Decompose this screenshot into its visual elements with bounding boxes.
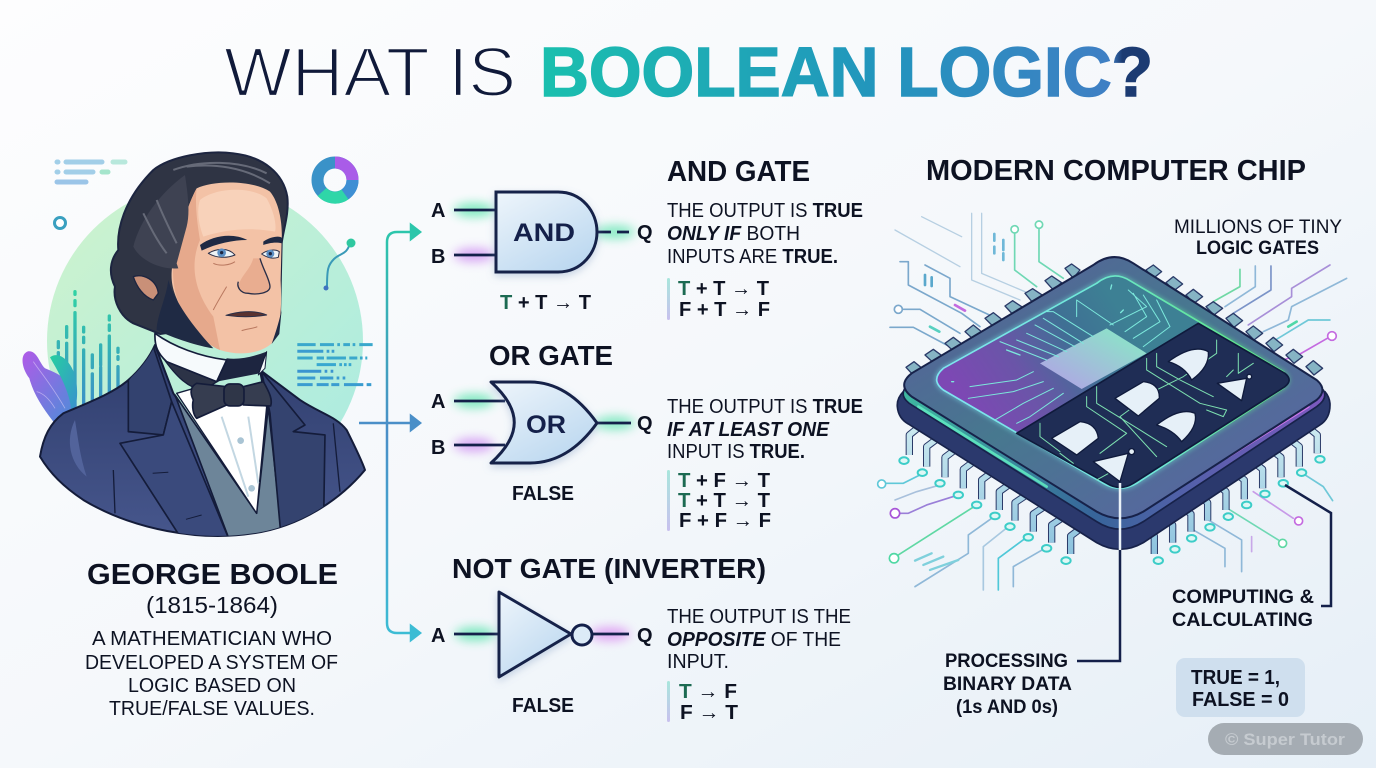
lower pins bbox=[909, 425, 1317, 554]
dates: (1815-1864) bbox=[146, 592, 278, 618]
decoration: code lines right bbox=[297, 345, 373, 385]
biography text: A MATHEMATICIAN WHO bbox=[92, 627, 332, 650]
watermark: © Super Tutor bbox=[1225, 730, 1345, 749]
OR gate truth table: T + F → T bbox=[678, 470, 770, 492]
logic gates on chip bbox=[1052, 349, 1252, 482]
decoration: leaves bbox=[23, 351, 77, 422]
callout: processing binary data: (1s AND 0s) bbox=[956, 697, 1058, 718]
callout: processing binary data bbox=[943, 651, 1072, 718]
OR gate description: IF AT LEAST ONE bbox=[667, 418, 830, 441]
AND gate diagram: Q bbox=[637, 222, 653, 244]
NOT gate truth table: F → T bbox=[680, 702, 738, 724]
OR gate truth table bbox=[667, 470, 771, 532]
chip heading: MODERN COMPUTER CHIP bbox=[926, 155, 1306, 187]
OR gate diagram: B bbox=[431, 437, 445, 459]
NOT gate truth table bbox=[667, 681, 738, 724]
window with gates bbox=[1017, 323, 1289, 487]
AND gate description: ONLY IF BOTH bbox=[667, 222, 800, 245]
OR gate diagram bbox=[431, 382, 653, 463]
NOT gate diagram bbox=[431, 592, 653, 677]
sideburns bbox=[157, 280, 213, 348]
callout box: true and false values: FALSE = 0 bbox=[1192, 689, 1289, 711]
bow tie bbox=[191, 383, 227, 418]
mouth bbox=[226, 312, 267, 317]
AND gate diagram: B bbox=[431, 246, 445, 268]
upper pins bbox=[906, 264, 1323, 376]
lapels bbox=[128, 347, 172, 435]
OR gate heading: OR GATE bbox=[489, 340, 613, 371]
OR gate description: THE OUTPUT IS TRUE bbox=[667, 395, 863, 418]
pin pads bbox=[899, 456, 1325, 564]
AND gate diagram: AND bbox=[513, 219, 575, 247]
callout: processing binary data: PROCESSING bbox=[945, 651, 1068, 672]
callout: computing and calculating: CALCULATING bbox=[1172, 610, 1313, 631]
AND gate diagram: A bbox=[431, 200, 445, 222]
AND gate description: INPUTS ARE TRUE. bbox=[667, 245, 838, 268]
NOT gate truth table: T → F bbox=[679, 681, 737, 703]
OR gate description: INPUT IS TRUE. bbox=[667, 440, 805, 463]
ear bbox=[133, 276, 158, 300]
callout box: true and false values: TRUE = 1, bbox=[1191, 667, 1280, 689]
eyes bbox=[208, 249, 235, 257]
nose bbox=[238, 258, 270, 294]
title: BOOLEAN LOGIC? bbox=[540, 33, 1153, 111]
title bbox=[224, 33, 1153, 111]
AND gate example: T + T → T bbox=[500, 292, 591, 314]
NOT gate heading: NOT GATE (INVERTER) bbox=[452, 553, 766, 584]
die bbox=[1040, 328, 1147, 389]
callout: computing and calculating bbox=[1172, 587, 1314, 631]
jacket bbox=[40, 345, 365, 536]
arrows: connector from Boole to gates bbox=[359, 225, 420, 640]
chip illustration bbox=[878, 213, 1347, 590]
NOT gate description: OPPOSITE OF THE bbox=[667, 628, 841, 651]
OR gate truth table: T + T → T bbox=[678, 490, 770, 512]
brows bbox=[200, 236, 247, 251]
chip base bbox=[897, 392, 1330, 549]
OR gate truth table: F + F → F bbox=[679, 510, 771, 532]
biography text: DEVELOPED A SYSTEM OF bbox=[85, 651, 338, 674]
callout: millions of tiny logic gates: LOGIC GATES bbox=[1196, 238, 1319, 259]
chip inner panel glow bbox=[937, 276, 1288, 488]
name heading: GEORGE BOOLE bbox=[87, 559, 338, 591]
OR gate diagram: A bbox=[431, 391, 445, 413]
face bbox=[172, 182, 282, 353]
leader line: processing bbox=[1077, 483, 1120, 661]
jacket details bbox=[70, 347, 340, 543]
NOT gate example: FALSE bbox=[512, 695, 574, 717]
waistcoat bbox=[175, 395, 282, 542]
OR gate example: FALSE bbox=[512, 483, 574, 505]
decoration: code lines top left bbox=[57, 162, 125, 182]
NOT gate diagram: Q bbox=[637, 625, 653, 647]
circuit traces around chip bbox=[878, 213, 1347, 590]
AND gate truth table: F + T → F bbox=[679, 299, 770, 321]
AND gate heading: AND GATE bbox=[667, 156, 810, 188]
AND gate diagram bbox=[431, 192, 653, 272]
chip side band bbox=[903, 387, 1325, 529]
shirt bbox=[177, 387, 267, 513]
OR gate description bbox=[667, 395, 863, 463]
hair bbox=[111, 152, 288, 334]
NOT gate description: THE OUTPUT IS THE bbox=[667, 605, 851, 628]
biography text: TRUE/FALSE VALUES. bbox=[109, 697, 315, 720]
callout: millions of tiny logic gates: MILLIONS OF TINY bbox=[1174, 217, 1342, 238]
callout: computing and calculating: COMPUTING & bbox=[1172, 587, 1314, 608]
AND gate truth table: T + T → T bbox=[678, 278, 769, 300]
icon: donut bbox=[318, 162, 353, 198]
callout box: true and false values bbox=[1176, 658, 1305, 717]
NOT gate description bbox=[667, 605, 851, 673]
callout: processing binary data: BINARY DATA bbox=[943, 674, 1072, 695]
collar bbox=[155, 333, 227, 382]
leader line: computing bbox=[1285, 485, 1331, 606]
OR gate diagram: OR bbox=[526, 411, 566, 439]
decoration: data bars bbox=[58, 292, 118, 407]
icon: small ring bbox=[54, 218, 66, 228]
icon: circuit branch bbox=[324, 238, 356, 290]
portrait: George Boole illustration bbox=[23, 152, 373, 543]
neck and cravat bbox=[217, 352, 267, 382]
NOT gate description: INPUT. bbox=[667, 650, 729, 673]
AND gate description bbox=[667, 199, 863, 268]
AND gate truth table bbox=[667, 278, 770, 321]
portrait background circle bbox=[47, 183, 363, 499]
figure: Boole bbox=[40, 152, 365, 543]
title: WHAT IS bbox=[224, 33, 516, 111]
watermark bbox=[1208, 723, 1363, 755]
chip inner panel bbox=[937, 276, 1288, 488]
chip surface traces bbox=[952, 285, 1170, 423]
OR gate diagram: Q bbox=[637, 413, 653, 435]
chip top plate bbox=[904, 257, 1322, 518]
biography text: LOGIC BASED ON bbox=[128, 674, 296, 697]
AND gate description: THE OUTPUT IS TRUE bbox=[667, 199, 863, 222]
callout: millions of tiny logic gates bbox=[1174, 217, 1342, 259]
NOT gate diagram: A bbox=[431, 625, 445, 647]
biography text bbox=[85, 627, 338, 720]
hair lock bbox=[133, 175, 188, 269]
